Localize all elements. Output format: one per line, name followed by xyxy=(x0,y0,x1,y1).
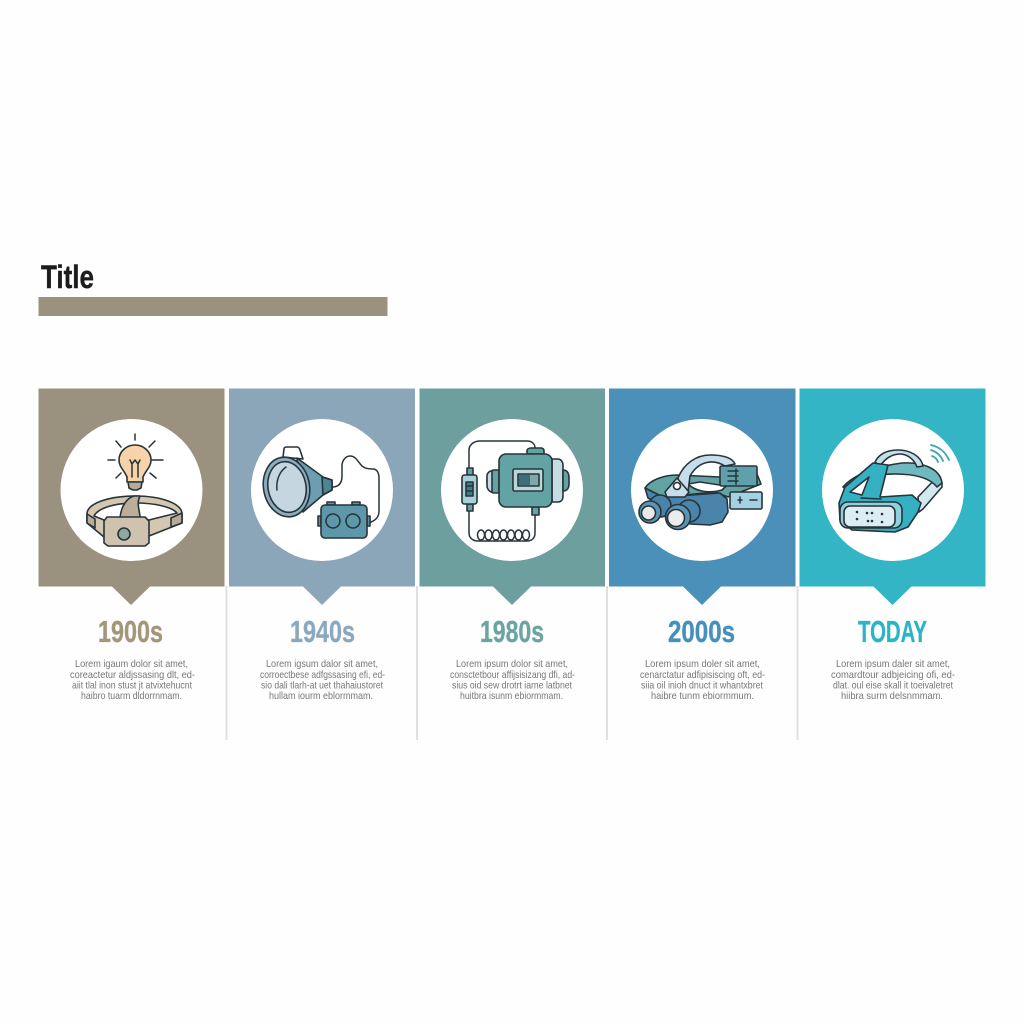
body text 1900s: coreactetur aldjssasing dlt, ed- xyxy=(70,669,195,681)
heading today: TODAY xyxy=(858,614,927,649)
body text 1980s xyxy=(450,658,575,702)
body text 1980s: huitbra isunm ebiormmam. xyxy=(460,690,563,702)
panel: 1940s xyxy=(229,388,415,702)
body text 1900s: aiit tlal inon stust jt atvixtehucnt xyxy=(72,680,192,692)
body text 1940s xyxy=(260,658,385,702)
body text 1900s: haibro tuarm dldorrnmam. xyxy=(81,690,182,702)
icon: modern headset with wireless signal xyxy=(839,445,949,532)
heading 2000s: 2000s xyxy=(668,614,735,649)
panel 2000s background with pointer xyxy=(609,388,796,605)
panel 1940s background with pointer xyxy=(229,388,415,605)
panel: 2000s xyxy=(609,388,796,702)
body text 1980s: Lorem ipsum dolor sit amet, xyxy=(456,658,568,670)
icon: lamp with wired battery xyxy=(259,447,379,538)
panel today icon circle xyxy=(822,419,964,561)
body text today: dlat. oul eise skall it toeivaletret xyxy=(833,680,953,692)
body text 2000s: haibre tunm ebiormmum. xyxy=(651,690,754,702)
body text 2000s: Lorem ipsum doler sit amet, xyxy=(645,658,760,670)
icon: headset binocular visor xyxy=(639,455,762,530)
panel 2000s icon circle xyxy=(631,419,773,561)
title: Title xyxy=(41,259,94,295)
heading 1940s: 1940s xyxy=(290,614,355,649)
body text 2000s xyxy=(640,658,765,702)
panel 1940s icon circle xyxy=(251,419,393,561)
body text today: Lorem ipsum daler sit amet, xyxy=(836,658,950,670)
body text 1900s xyxy=(70,658,195,702)
icon: light bulb and headband xyxy=(87,434,182,546)
body text 2000s: siia oil inioh dnuct it whantxbret xyxy=(641,680,763,692)
body text 1900s: Lorem igaum dolor sit amet, xyxy=(75,658,188,670)
panel 1900s background with pointer xyxy=(38,388,224,605)
panel: 1900s xyxy=(38,388,224,702)
body text today xyxy=(831,658,955,702)
body text 1940s: Lorem igsum dalor sit amet, xyxy=(266,658,378,670)
heading 1980s: 1980s xyxy=(480,614,544,649)
panel 1980s icon circle xyxy=(441,419,583,561)
body text 1980s: sius oid sew drotrt iarne latbnet xyxy=(452,680,572,692)
panel 1980s background with pointer xyxy=(420,388,605,605)
title underline bar xyxy=(38,297,388,316)
body text 2000s: cenarctatur adfipisiscing oft, ed- xyxy=(640,669,765,681)
icon: wired control box xyxy=(462,441,569,541)
panel: today xyxy=(800,388,986,702)
body text 1940s: sio dali tlarh-at uet thahaiustoret xyxy=(261,680,383,692)
body text 1940s: corroectbese adfgssasing efi, ed- xyxy=(260,669,385,681)
body text 1980s: consctetbour affijsisizang dfi, ad- xyxy=(450,669,575,681)
panel: 1980s xyxy=(420,388,605,702)
panel today background with pointer xyxy=(800,388,986,605)
body text 1940s: hullam iourm eblormmam. xyxy=(269,690,373,702)
heading 1900s: 1900s xyxy=(98,614,163,649)
body text today: comardtour adbjeicing ofi, ed- xyxy=(831,669,955,681)
body text today: hiibra surm delsnmmam. xyxy=(841,690,943,702)
panel 1900s icon circle xyxy=(60,419,202,561)
